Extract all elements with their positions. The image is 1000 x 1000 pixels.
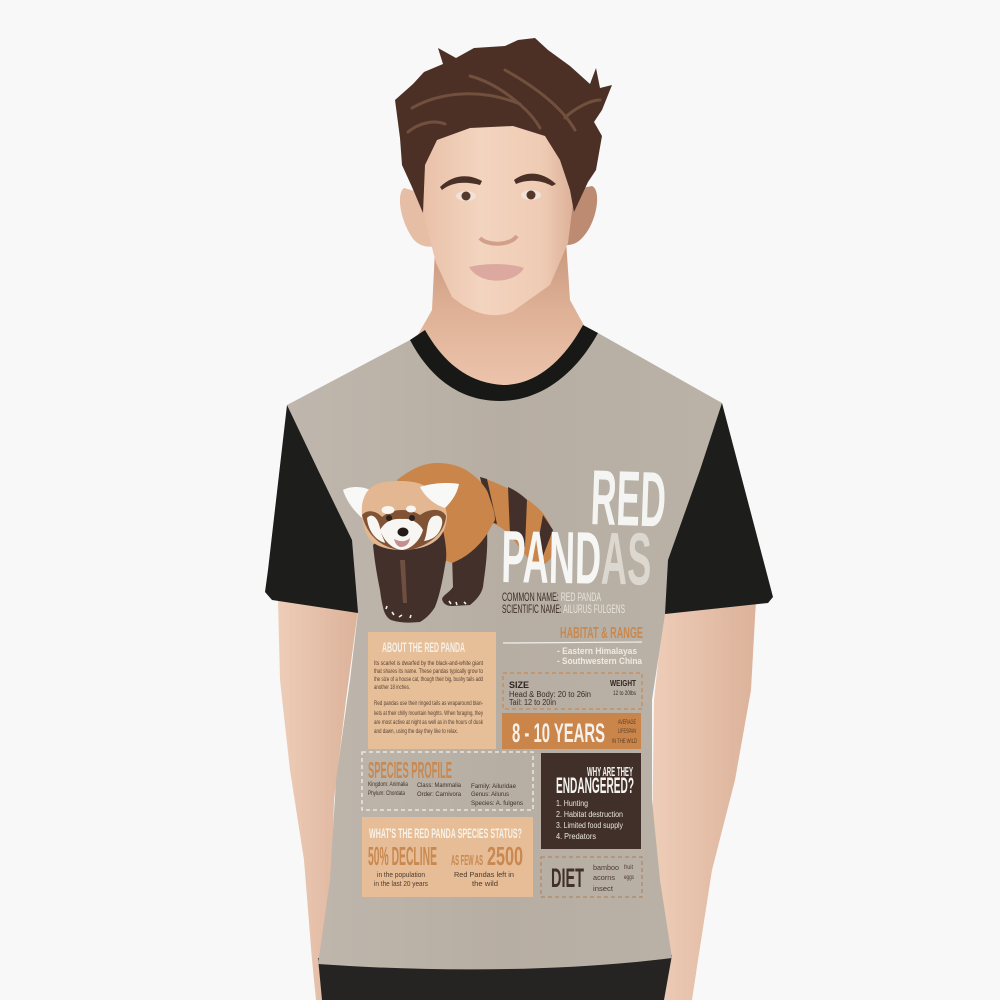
right arm (652, 600, 756, 1000)
about text (374, 660, 484, 735)
head (395, 38, 612, 315)
lifespan value: 8 - 10 YEARS (512, 718, 605, 748)
decline caption: in the population (377, 870, 425, 879)
front leg (373, 520, 446, 623)
left sleeve (265, 405, 362, 613)
panel: species status: in the last 20 years (374, 879, 428, 888)
taxonomy: Kingdom: Animalia (368, 782, 409, 788)
about text: another 18 inches. (374, 684, 410, 691)
left ear (343, 487, 370, 518)
panel: endangered: WHY ARE THEY (587, 764, 633, 779)
about text: the size of a house cat, though their big, bushy tails add (374, 676, 483, 683)
endangered list: 3. Limited food supply (556, 821, 623, 830)
diet list: acorns (593, 873, 615, 882)
tail (480, 477, 555, 565)
face (418, 105, 574, 315)
common name: COMMON NAME: RED PANDA (502, 590, 601, 604)
status heading: WHAT'S THE RED PANDA SPECIES STATUS? (369, 825, 522, 841)
panel: species status: AS FEW AS (451, 852, 483, 869)
size: SIZE (509, 680, 529, 690)
lips (469, 264, 524, 281)
about text: and dawn, using the day they like to relax. (374, 728, 458, 735)
red panda illustration (343, 463, 555, 623)
panel: about: ABOUT THE RED PANDA (382, 639, 465, 655)
about text: Its scarlet is dwarfed by the black-and-white giant (374, 660, 483, 667)
nose shadow (480, 236, 517, 244)
diet list: insect (593, 884, 614, 893)
diet list: eggs (624, 874, 635, 881)
habitat list: - Eastern Himalayas (557, 646, 637, 656)
taxonomy: Genus: Ailurus (471, 792, 509, 798)
size and weight box: Tail: 12 to 20in (509, 698, 556, 707)
panel: diet (541, 857, 642, 897)
about text: kets at their chilly mountain heights. When foraging, they (374, 710, 483, 717)
right cheek (424, 516, 442, 541)
eyes (386, 515, 415, 521)
taxonomy: Family: Ailuridae (471, 784, 517, 790)
2500 caption: Red Pandas left in (454, 870, 514, 879)
endangered list (556, 799, 623, 841)
taxonomy: Phylum: Chordata (368, 791, 406, 797)
left iris (462, 192, 470, 200)
habitat heading: HABITAT & RANGE (560, 625, 643, 642)
diet heading: DIET (551, 863, 584, 893)
title (501, 453, 667, 601)
lifespan label: LIFESPAN (618, 728, 636, 735)
taxonomy: Order: Carnivora (417, 792, 462, 798)
tail stripe 3 (537, 515, 553, 556)
panel: endangered (541, 753, 641, 849)
species profile: SPECIES PROFILE (368, 757, 452, 783)
weight value: 12 to 20lbs (613, 691, 636, 697)
mouth (394, 538, 410, 547)
weight: WEIGHT (610, 679, 636, 688)
face markings (362, 510, 446, 550)
endangered list: 4. Predators (556, 832, 596, 841)
about text: Red pandas use their ringed tails as wraparound blan- (374, 700, 483, 707)
body (397, 463, 495, 563)
panel: species status: the wild (472, 879, 498, 888)
lifespan label: AVERAGE (618, 719, 636, 726)
left eyebrow (440, 176, 482, 190)
leg highlight (400, 560, 407, 603)
habitat and range: - Southwestern China (557, 656, 643, 666)
infographic (343, 453, 667, 897)
diet list: fruit (624, 864, 633, 871)
names (502, 590, 625, 616)
left cheek (367, 516, 385, 543)
claws (386, 601, 466, 618)
diet list: bamboo (593, 863, 619, 872)
collar (410, 325, 598, 401)
left eye (456, 191, 476, 201)
hair highlights (408, 70, 600, 132)
about text: are most active at night as well as in the hours of dusk (374, 719, 484, 726)
right ear (562, 186, 597, 245)
about text: that shares its name. These pandas typically grow to (374, 668, 483, 675)
tail tip (535, 562, 545, 567)
back leg (442, 530, 487, 606)
left arm (278, 600, 358, 1000)
right iris (526, 190, 536, 200)
trousers (318, 955, 672, 1000)
size values: Head & Body: 20 to 26in (509, 690, 591, 699)
scientific name: SCIENTIFIC NAME: AILURUS FULGENS (502, 602, 625, 616)
right eyebrow spot (406, 506, 416, 512)
product photo: man wearing red panda infographic t-shirt: RED (589, 453, 667, 544)
right eye (521, 190, 541, 200)
diet list (593, 863, 635, 893)
neck (415, 240, 592, 400)
t-shirt body (287, 333, 722, 969)
size and weight box (503, 673, 642, 709)
endangered list: 1. Hunting (556, 799, 588, 808)
left ear (400, 188, 436, 247)
panel: species status: 50% DECLINE (368, 841, 437, 871)
dashed border (503, 673, 642, 709)
2500 stat: 2500 (487, 841, 523, 871)
panel: species status (362, 817, 533, 897)
right eyebrow (514, 174, 556, 186)
right ear (420, 483, 459, 508)
right sleeve (662, 403, 773, 614)
endangered list: 2. Habitat destruction (556, 810, 623, 819)
left eyebrow spot (382, 506, 394, 514)
taxonomy (368, 782, 523, 807)
tail stripe 1 (480, 477, 497, 524)
lifespan label (612, 719, 637, 745)
tail stripe 2 (508, 487, 527, 547)
head (362, 481, 447, 550)
habitat and range (503, 625, 643, 666)
muzzle (380, 519, 423, 550)
about background (368, 632, 496, 749)
panel: about (368, 632, 496, 749)
nose (398, 528, 408, 536)
lifespan box (502, 713, 641, 749)
PANDAS: PANDAS (501, 515, 652, 601)
panel: endangered: ENDANGERED? (556, 773, 634, 798)
hair (395, 38, 612, 213)
species profile (362, 752, 533, 810)
lifespan label: IN THE WILD (612, 738, 637, 745)
taxonomy: Species: A. fulgens (471, 801, 523, 807)
taxonomy: Class: Mammalia (417, 783, 462, 789)
